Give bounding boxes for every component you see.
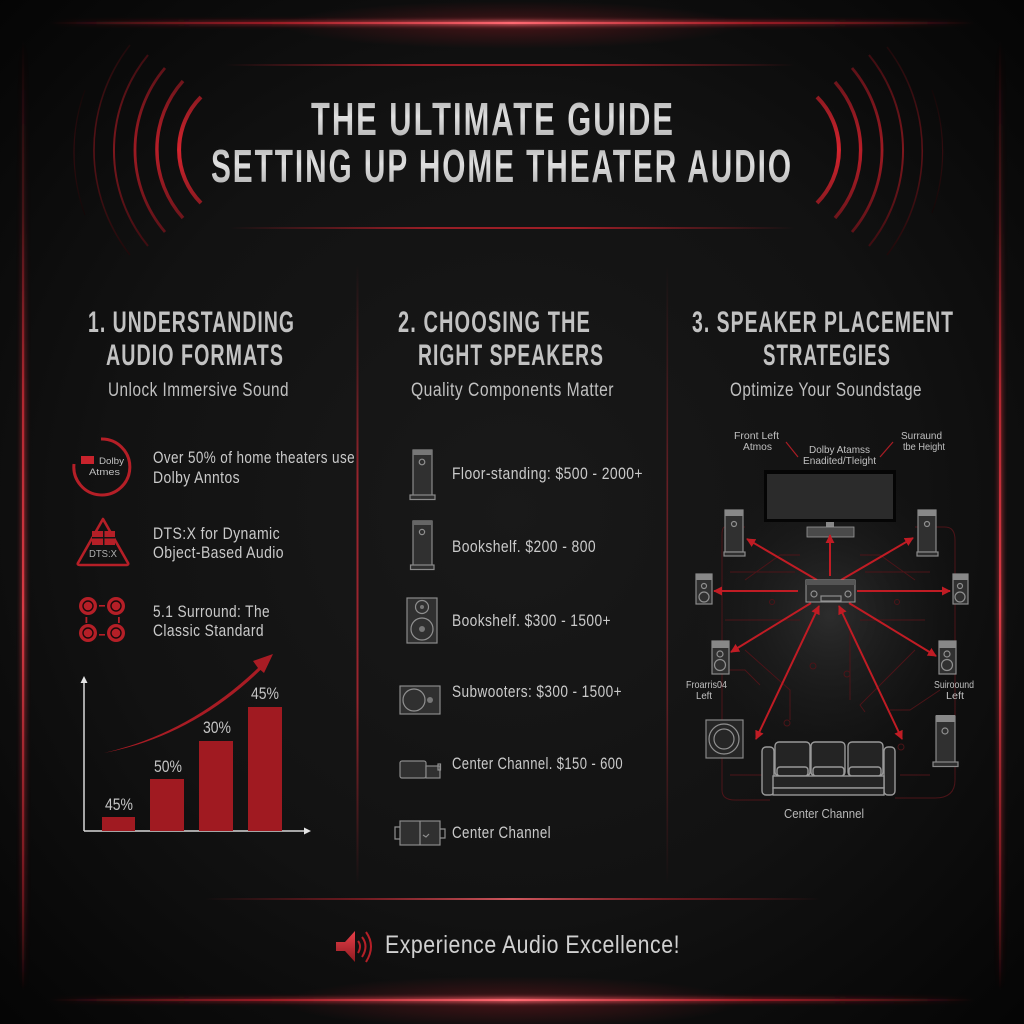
- icon: sofa: [762, 742, 895, 795]
- icon: Dolby Atmos ring: Dolby: [99, 456, 124, 467]
- bar chart: [80, 654, 311, 834]
- labels: top: tbe Height: [903, 441, 945, 453]
- title: THE ULTIMATE GUIDE: [311, 93, 675, 145]
- label: center channel: Center Channel: [784, 807, 864, 821]
- text: floor-standing price: Floor-standing: $500 - 2000+: [452, 464, 643, 483]
- icon: TV: [764, 470, 896, 537]
- icon: side speakers: [696, 574, 968, 604]
- text: bookshelf price: Bookshelf. $200 - 800: [452, 537, 596, 556]
- icon: rear speakers: [712, 641, 956, 674]
- heading: section 3: STRATEGIES: [763, 339, 891, 372]
- icon: subwoofer: [706, 720, 743, 758]
- column dividers: [356, 265, 668, 885]
- icon: left sound waves: [74, 45, 201, 255]
- heading: section 1: [88, 306, 295, 372]
- subheading: section 2: Quality Components Matter: [411, 380, 614, 401]
- icon: right sound waves: [817, 47, 943, 255]
- bar value labels: 50%: [154, 757, 182, 776]
- text: DTS:X fact: DTS:X for Dynamic: [153, 524, 280, 543]
- heading: section 2: RIGHT SPEAKERS: [418, 339, 604, 372]
- arrows: receiver to speakers: [714, 535, 950, 739]
- footer rule: [205, 898, 820, 900]
- labels: rear speakers: [686, 679, 974, 702]
- text: DTS:X fact: Object-Based Audio: [153, 543, 284, 562]
- labels: top: Front Left: [734, 430, 779, 442]
- heading: section 2: [398, 306, 604, 372]
- text: 5.1 surround fact: Classic Standard: [153, 621, 264, 640]
- labels: top: Atmos: [743, 441, 772, 453]
- heading: section 3: [692, 306, 954, 372]
- icon: receiver: [806, 580, 855, 602]
- bar value labels: 30%: [203, 718, 231, 737]
- text: Dolby Atmos fact: Over 50% of home theaters use: [153, 448, 355, 467]
- subheading: section 1: Unlock Immersive Sound: [108, 380, 289, 401]
- title: [211, 93, 793, 192]
- labels: top: [734, 430, 945, 467]
- icon: subwoofer: [400, 686, 440, 714]
- text: Dolby Atmos fact: [153, 448, 355, 487]
- icon: floor-standing speaker: [410, 450, 435, 500]
- text: DTS:X fact: [153, 524, 284, 562]
- icon: 5.1 surround: [79, 597, 125, 642]
- icon: center channel speaker 2: [395, 821, 445, 845]
- footer call to action: [336, 931, 680, 962]
- icon: tall bookshelf speaker: [410, 521, 434, 570]
- bar value labels: 45%: [251, 684, 279, 703]
- text: center channel: Center Channel: [452, 823, 551, 842]
- room diagram: [686, 430, 974, 821]
- icon: center channel speaker: [400, 761, 440, 778]
- icon: front speakers: [724, 510, 938, 556]
- text: subwoofer price: Subwooters: $300 - 1500+: [452, 682, 622, 701]
- panel: audio formats: [74, 306, 355, 834]
- labels: rear speakers: Left: [946, 690, 964, 702]
- text: tagline: Experience Audio Excellence!: [385, 931, 680, 959]
- icon: bookshelf speaker: [407, 598, 437, 643]
- text: 5.1 surround fact: 5.1 Surround: The: [153, 602, 270, 621]
- labels: rear speakers: Suiroound: [934, 679, 974, 691]
- labels: rear speakers: Left: [696, 690, 712, 702]
- chart axes: [80, 676, 311, 834]
- labels: top: Surraund: [901, 430, 942, 442]
- text: Dolby Atmos fact: Dolby Anntos: [153, 468, 240, 487]
- subheading: section 3: Optimize Your Soundstage: [730, 380, 922, 401]
- text: center channel price: Center Channel. $150 - 600: [452, 754, 623, 773]
- icon: DTS:X triangle: [78, 519, 128, 565]
- labels: top: Enadited/Tleight: [803, 455, 876, 467]
- header rules: [225, 64, 795, 229]
- labels: rear speakers: Froarris04: [686, 679, 727, 691]
- icon: DTS:X triangle: DTS:X: [89, 549, 117, 560]
- panel: speaker placement: [686, 306, 974, 821]
- trend arrow: [104, 654, 273, 753]
- bar value labels: [105, 684, 279, 814]
- icon: Dolby Atmos ring: Atmes: [89, 467, 120, 478]
- heading: section 1: AUDIO FORMATS: [106, 339, 284, 372]
- panel: choosing speakers: [395, 306, 643, 845]
- circuit traces: [722, 527, 955, 800]
- icon: Dolby Atmos ring: [74, 439, 130, 495]
- labels: top: Dolby Atamss: [809, 444, 870, 456]
- bar value labels: 45%: [105, 795, 133, 814]
- text: bookshelf price 2: Bookshelf. $300 - 1500+: [452, 611, 611, 630]
- heading: section 1: 1. UNDERSTANDING: [88, 306, 295, 339]
- icon: speaker: [336, 931, 371, 962]
- bars: [102, 707, 282, 831]
- heading: section 2: 2. CHOOSING THE: [398, 306, 591, 339]
- icon: floor speaker: [933, 715, 958, 766]
- text: 5.1 surround fact: [153, 602, 270, 640]
